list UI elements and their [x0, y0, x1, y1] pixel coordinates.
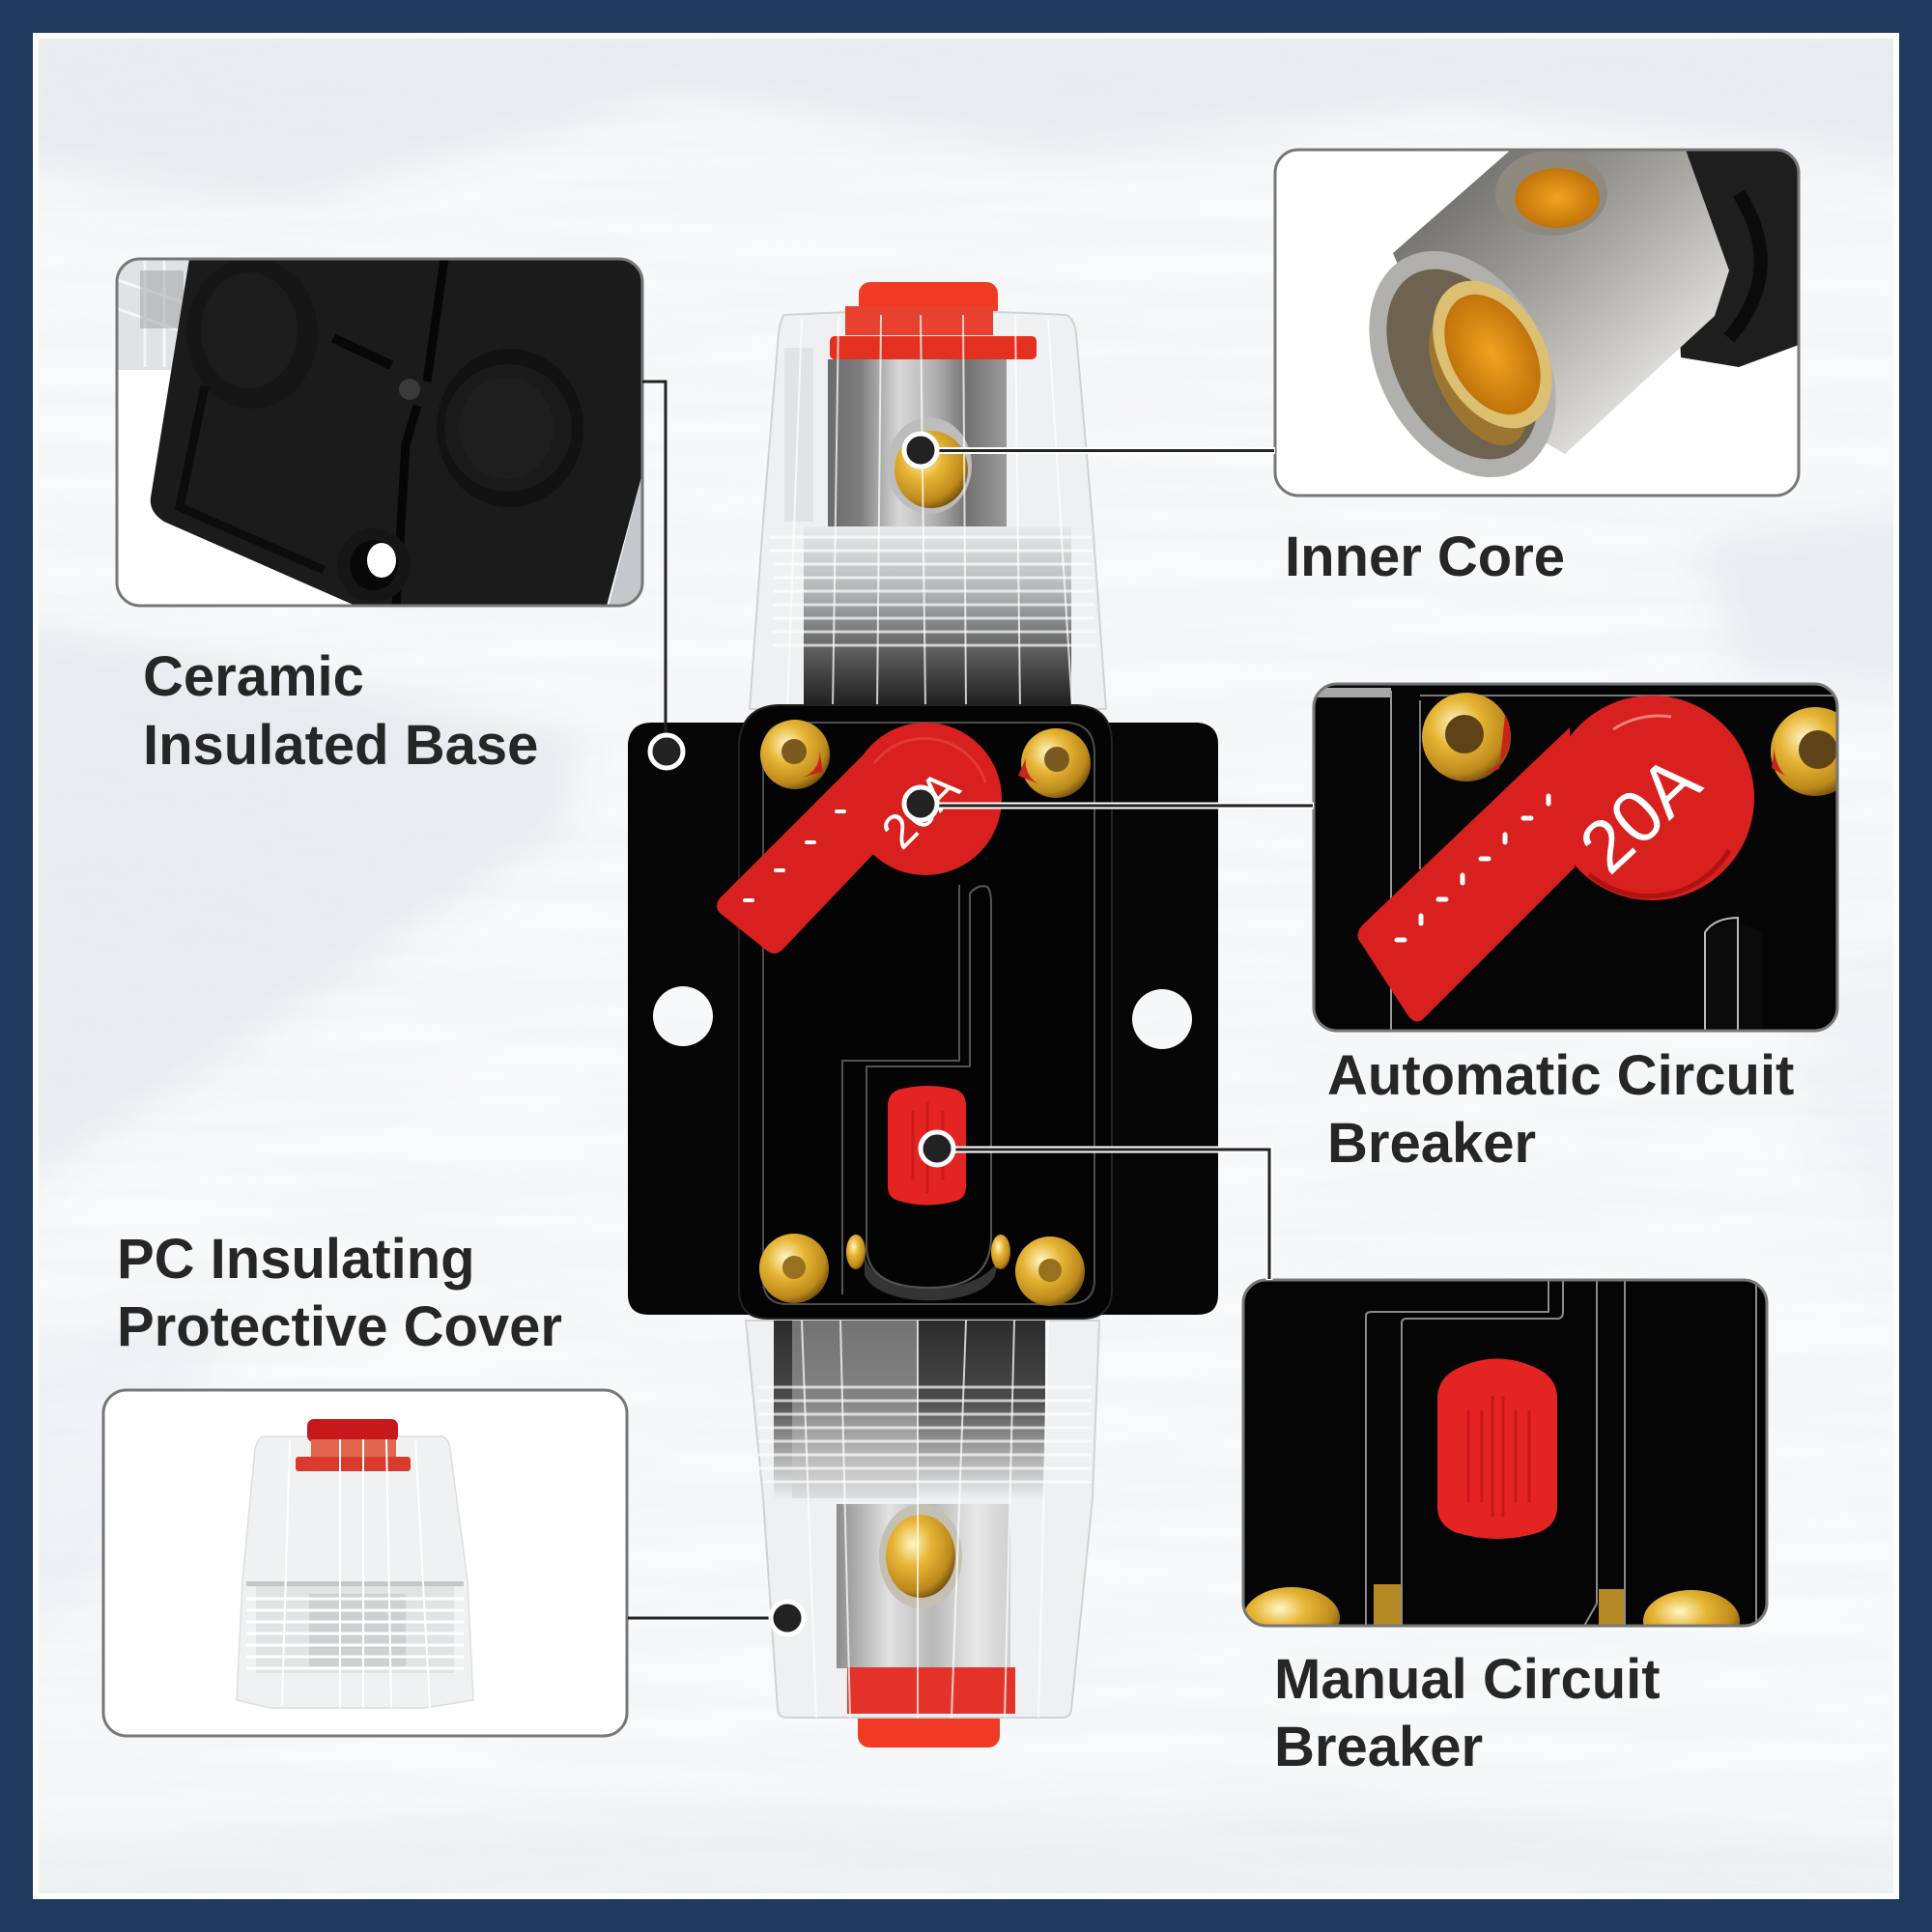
panel: automatic circuit breaker: 20A [1565, 740, 1717, 889]
heading: PC Insulating Protective Cover: PC Insulating [117, 1228, 475, 1291]
heading: Ceramic Insulated Base [143, 645, 538, 777]
panel: PC insulating protective cover [103, 1390, 627, 1736]
rear mounting plate with holes [628, 723, 1218, 1315]
callout dot: automatic breaker [904, 787, 937, 820]
top protective cover [750, 282, 1106, 709]
heading: PC Insulating Protective Cover [117, 1228, 562, 1358]
leader line: manual breaker [937, 1150, 1269, 1280]
red manual reset button [888, 1086, 966, 1206]
heading: Manual Circuit Breaker [1274, 1648, 1661, 1778]
heading: Manual Circuit Breaker: Breaker [1274, 1716, 1483, 1778]
leader line: automatic breaker [921, 802, 1314, 810]
bottom protective cover [746, 1321, 1099, 1747]
heading: Inner Core: Inner Core [1285, 526, 1565, 588]
leader line: ceramic base [642, 382, 666, 752]
heading: PC Insulating Protective Cover: Protective Cover [117, 1295, 562, 1358]
main product: circuit breaker [628, 282, 1218, 1747]
gold screws [759, 720, 1091, 1306]
heading: Manual Circuit Breaker: Manual Circuit [1274, 1648, 1661, 1711]
heading: Ceramic Insulated Base: Ceramic [143, 645, 364, 708]
red lever labelled 20A: 20A [871, 759, 971, 859]
panel: inner core [1275, 150, 1799, 510]
leader line: inner core [921, 447, 1275, 454]
heading: Ceramic Insulated Base: Insulated Base [143, 714, 538, 777]
leader line: protective cover [628, 1617, 787, 1619]
callout dot: ceramic base [650, 735, 683, 768]
callout dot: protective cover [771, 1602, 804, 1634]
callout dot: inner core [904, 434, 937, 467]
panel: manual circuit breaker [1243, 1280, 1767, 1652]
panel: automatic circuit breaker [1314, 684, 1860, 1031]
heading: Automatic Circuit Breaker: Automatic Circuit [1327, 1044, 1794, 1107]
callout dot: manual breaker [921, 1132, 953, 1165]
heading: Automatic Circuit Breaker [1327, 1044, 1794, 1175]
panel: ceramic insulated base [117, 258, 642, 606]
icon: clear cover [237, 1419, 473, 1708]
front breaker housing [739, 705, 1112, 1319]
red lever labelled 20A [717, 723, 1002, 953]
heading: Automatic Circuit Breaker: Breaker [1327, 1112, 1536, 1175]
